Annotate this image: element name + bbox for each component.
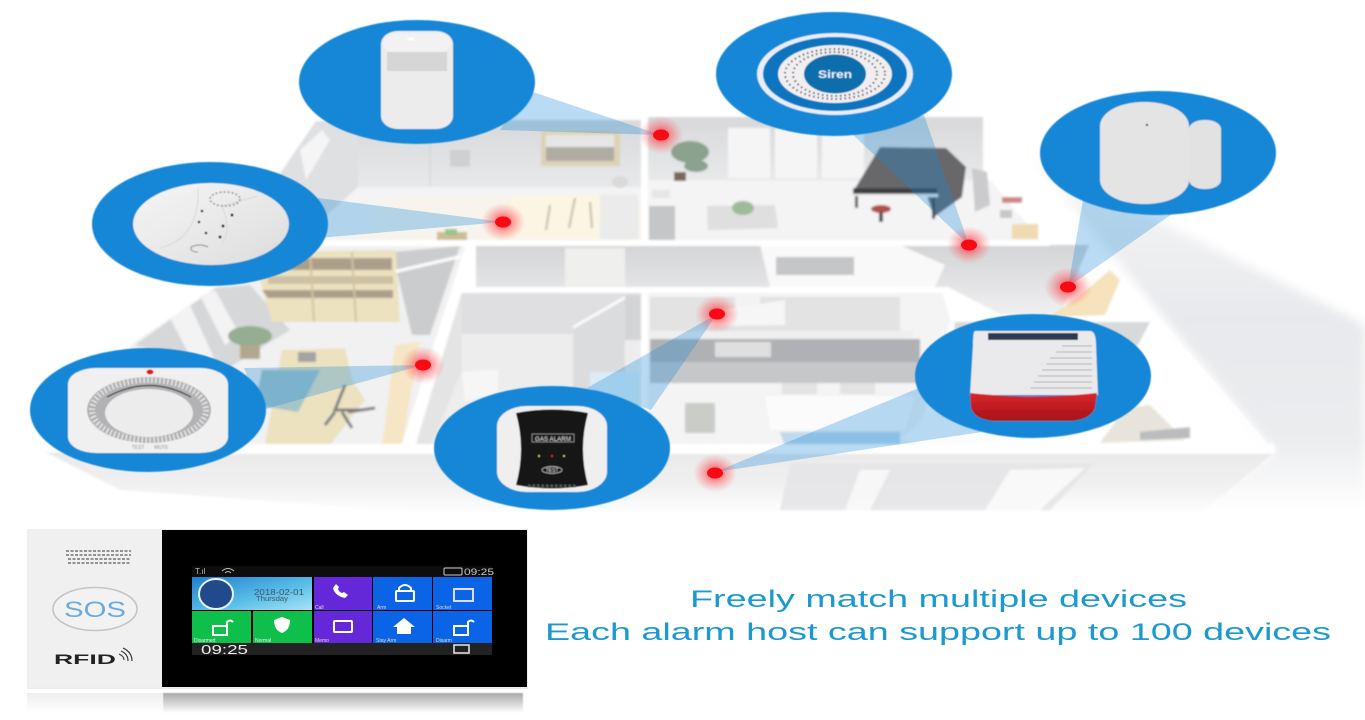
tile: disarmed: Disarmed	[194, 638, 216, 644]
tile: socket: Socket	[436, 605, 452, 611]
beam: gas alarm	[587, 314, 717, 410]
tile: memo	[314, 611, 372, 644]
marker: siren	[947, 226, 991, 264]
right side room	[900, 322, 1190, 447]
tile: date and globe	[192, 577, 312, 610]
floor plan illustration	[45, 115, 1275, 510]
marker: gas alarm	[695, 295, 739, 333]
bottom bar	[192, 642, 492, 657]
room: kitchen and dining	[648, 292, 950, 447]
tile: date and globe: 2018-02-01	[254, 588, 305, 597]
marker: door sensor	[1044, 267, 1092, 307]
tile: stay arm: Stay Arm	[376, 638, 396, 644]
marker: motion sensor	[639, 116, 683, 154]
beam: door sensor	[1068, 200, 1175, 287]
tile: disarm	[433, 611, 492, 644]
badge: gas alarm: GAS ALARM	[535, 437, 571, 443]
badge: gas alarm: TEST	[546, 468, 558, 474]
badge: siren	[716, 12, 952, 136]
room: living room with piano	[648, 117, 1040, 240]
badge: smoke detector	[92, 162, 328, 286]
status bar: T.ıl	[195, 567, 205, 576]
badge: CO detector: TEST MUTE	[132, 445, 169, 451]
exterior wall bottom	[45, 452, 1275, 514]
alarm host panel	[27, 529, 528, 713]
bottom wall windows	[780, 463, 1095, 510]
room: hallway	[476, 245, 1120, 317]
exterior wall right	[1030, 155, 1365, 510]
room: bathroom	[415, 292, 641, 447]
badge: motion sensor	[299, 20, 535, 144]
tile: disarmed	[192, 611, 251, 644]
badge: CO detector	[30, 348, 266, 472]
red marker dots	[401, 116, 1092, 492]
SOS button: SOS	[64, 597, 126, 622]
beam: smoke detector	[318, 198, 503, 238]
tile: normal: Normal	[255, 638, 271, 644]
caption line 2: Each alarm host can support up to 100 devices	[545, 619, 1331, 646]
status bar: 09:25	[464, 567, 494, 577]
panel left side	[28, 530, 162, 687]
RFID label	[54, 648, 132, 667]
status bar	[192, 566, 494, 577]
marker: smoke detector	[481, 203, 525, 241]
room: study	[130, 245, 470, 447]
tile: socket	[433, 577, 492, 611]
panel reflection	[27, 693, 523, 713]
tile: date and globe: Thursday	[256, 596, 289, 603]
badge: outdoor solar siren	[915, 314, 1151, 438]
badge: door sensor	[1040, 91, 1276, 215]
tile: normal	[253, 611, 312, 644]
tile: call: Call	[315, 605, 324, 611]
beam: outdoor siren	[715, 388, 982, 472]
RFID label: RFID	[54, 651, 116, 667]
wall lines	[100, 117, 1275, 454]
tile: arm	[373, 577, 432, 611]
tile: call	[314, 577, 372, 611]
beam: motion sensor	[500, 90, 661, 135]
marker: CO detector	[401, 346, 445, 384]
caption	[545, 586, 1331, 646]
beam: siren	[848, 115, 969, 245]
caption line 1: Freely match multiple devices	[690, 586, 1187, 613]
badge: gas alarm	[434, 386, 670, 510]
panel frame	[27, 529, 528, 689]
tile: stay arm	[373, 611, 432, 644]
touch screen bezel	[162, 530, 527, 687]
tile: disarm: Disarm	[436, 638, 452, 644]
tile: memo: Memo	[315, 638, 329, 644]
speaker grille	[66, 551, 131, 563]
bookshelf	[252, 250, 400, 322]
marker: outdoor siren	[693, 454, 737, 492]
badge: siren: Siren	[818, 69, 852, 81]
SOS button	[53, 588, 137, 630]
bottom bar: 09:25	[201, 642, 248, 657]
tile: arm: Arm	[377, 605, 386, 611]
room: bedroom	[270, 120, 641, 240]
beam: CO detector	[244, 365, 423, 410]
floor slab	[45, 115, 1275, 452]
